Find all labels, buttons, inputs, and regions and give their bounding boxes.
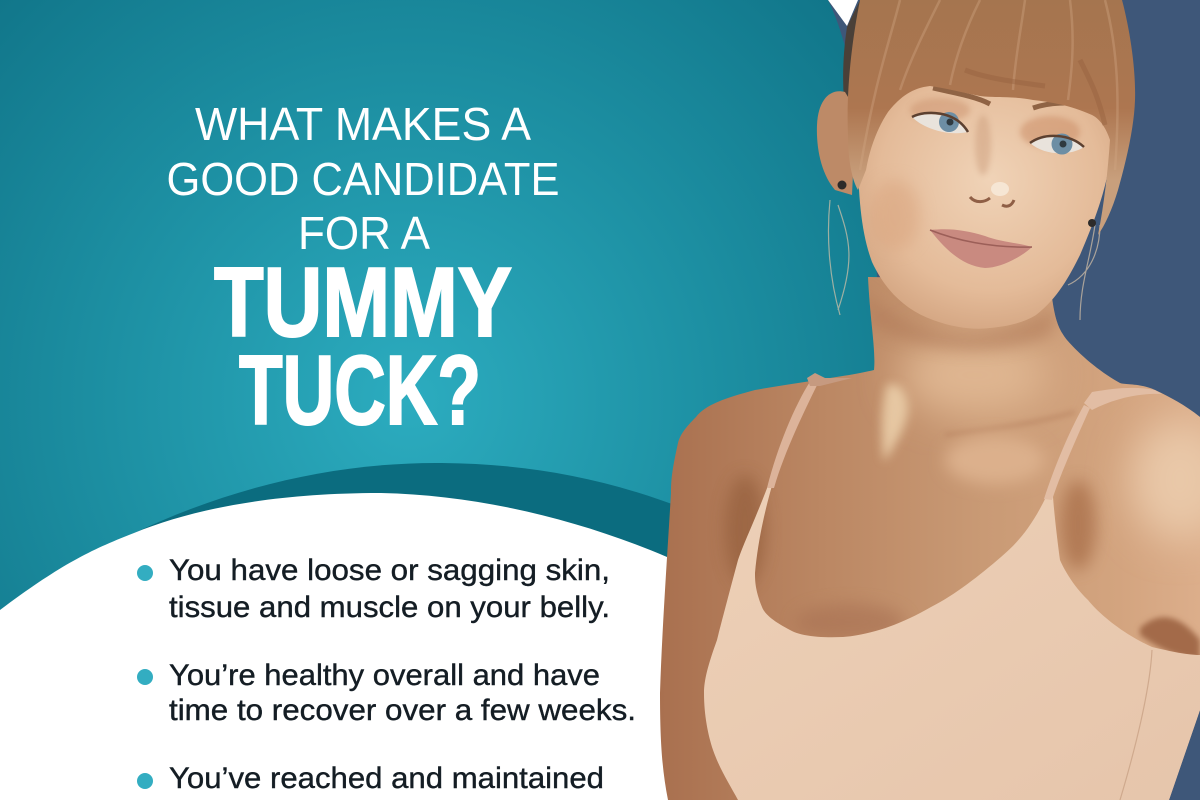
armpit shadow	[1060, 480, 1096, 570]
bullet 2	[137, 659, 636, 727]
hair strands	[860, 0, 1118, 170]
right shoulder highlight	[1130, 420, 1200, 540]
background: teal panel	[0, 0, 880, 800]
left eye	[912, 112, 968, 133]
dark teal swoosh	[120, 463, 700, 600]
chest light	[945, 436, 1045, 484]
body: shoulders, neck and arms	[660, 277, 1200, 800]
strap left	[767, 380, 819, 488]
white curved panel	[0, 493, 700, 800]
bullet 1	[137, 554, 610, 624]
bullet list	[137, 554, 636, 795]
woman photo illustration	[660, 0, 1200, 800]
strap right upper	[1084, 388, 1162, 410]
wisp strands	[828, 200, 1100, 320]
camisole top	[704, 482, 1200, 800]
bullet 1: tissue and muscle on your belly.	[169, 591, 610, 624]
darker hair strands	[965, 60, 1105, 125]
earring right	[1088, 219, 1096, 227]
brow right	[1033, 103, 1087, 108]
nose	[970, 182, 1014, 206]
sternum highlight	[882, 384, 908, 462]
buckle left	[807, 373, 852, 386]
lips	[930, 229, 1032, 268]
title emphasis: tummy: TUMMY	[214, 247, 512, 357]
eye socket shade left	[910, 98, 970, 122]
strap right	[1044, 405, 1090, 500]
cleavage shadow	[804, 604, 902, 637]
title line: good candidate: GOOD CANDIDATE	[166, 153, 560, 205]
title emphasis: tuck: TUCK?	[239, 335, 481, 445]
neck light	[900, 335, 1050, 415]
bullet 1: You have loose or sagging skin,	[169, 554, 610, 587]
nose side shade	[975, 115, 991, 175]
right eye	[1030, 134, 1084, 154]
bullet 3: You’ve reached and maintained	[169, 762, 604, 795]
bullet 2: You’re healthy overall and have	[169, 659, 600, 692]
hair bun, dark	[843, 0, 900, 120]
shadow under chin	[870, 304, 1056, 356]
title	[166, 98, 560, 445]
earring left	[838, 180, 846, 190]
face shading	[870, 98, 1080, 250]
ear	[817, 91, 856, 195]
white corner wedge	[828, 0, 858, 26]
title line: what makes a: WHAT MAKES A	[195, 98, 531, 150]
eye socket shade right	[1020, 116, 1080, 148]
cheek left shade	[870, 180, 920, 250]
face	[858, 60, 1110, 329]
collarbone shadow	[945, 412, 1075, 435]
hair fringe	[848, 0, 1135, 235]
body shading	[725, 285, 1200, 660]
brow left	[933, 88, 990, 104]
chest shadow left	[725, 475, 765, 585]
arm crease	[1140, 617, 1200, 660]
camisole seam	[1120, 650, 1152, 800]
bullet 2: time to recover over a few weeks.	[169, 694, 636, 727]
mouth line	[930, 230, 1032, 247]
title line: for a: FOR A	[298, 207, 430, 259]
